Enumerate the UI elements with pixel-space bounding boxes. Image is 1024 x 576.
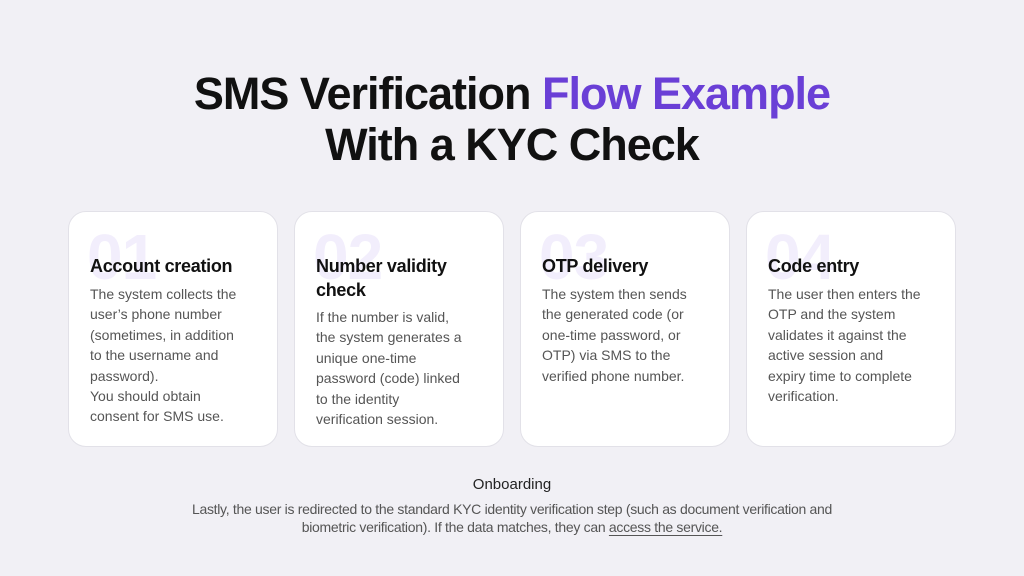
body text: consent for SMS use.: [90, 408, 224, 424]
card: 01 account creation: [68, 211, 278, 447]
onboarding text: Lastly, the user is redirected to the standard KYC identity verification step (such as document verification and: [192, 501, 832, 517]
body text: active session and: [768, 347, 883, 363]
body text: (sometimes, in addition: [90, 327, 234, 343]
body text: to the username and: [90, 347, 218, 363]
body text: The system then sends: [542, 286, 687, 302]
card: 02 number validity check: [294, 211, 504, 447]
number 01: 01: [87, 221, 156, 293]
body text: [542, 286, 687, 384]
heading: Account creation: [90, 256, 232, 276]
onboarding text: [192, 501, 832, 536]
body text: The system collects the: [90, 286, 236, 302]
body text: one-time password, or: [542, 327, 681, 343]
body text: verification.: [768, 388, 839, 404]
title: [194, 68, 830, 170]
body text: [768, 286, 921, 404]
body text: password (code) linked: [316, 370, 460, 386]
number 03: 03: [539, 221, 608, 293]
body text: the generated code (or: [542, 306, 684, 322]
body text: OTP and the system: [768, 306, 895, 322]
card: 04 code entry: [746, 211, 956, 447]
body text: The user then enters the: [768, 286, 921, 302]
onboarding text: biometric verification). If the data matches, they can access the service.: [302, 518, 722, 534]
body text: validates it against the: [768, 327, 907, 343]
title: SMS Verification Flow Example: [194, 68, 830, 119]
heading: Number validity check: [316, 256, 447, 300]
body text: verification session.: [316, 411, 438, 427]
body text: to the identity: [316, 391, 399, 407]
body text: user’s phone number: [90, 306, 222, 322]
body text: password).: [90, 368, 158, 384]
body text: You should obtain: [90, 388, 201, 404]
body text: the system generates a: [316, 329, 462, 345]
body text: [90, 286, 236, 424]
number 02: 02: [313, 221, 382, 293]
number 04: 04: [765, 221, 834, 293]
body text: expiry time to complete: [768, 368, 912, 384]
body text: If the number is valid,: [316, 309, 449, 325]
heading: OTP delivery: [542, 256, 648, 276]
body text: OTP) via SMS to the: [542, 347, 670, 363]
body text: verified phone number.: [542, 368, 684, 384]
card: 03 OTP delivery: [520, 211, 730, 447]
heading: Code entry: [768, 256, 859, 276]
body text: [316, 309, 462, 427]
onboarding heading: Onboarding: [473, 476, 551, 493]
body text: unique one-time: [316, 350, 416, 366]
title: With a KYC Check: [325, 119, 699, 170]
